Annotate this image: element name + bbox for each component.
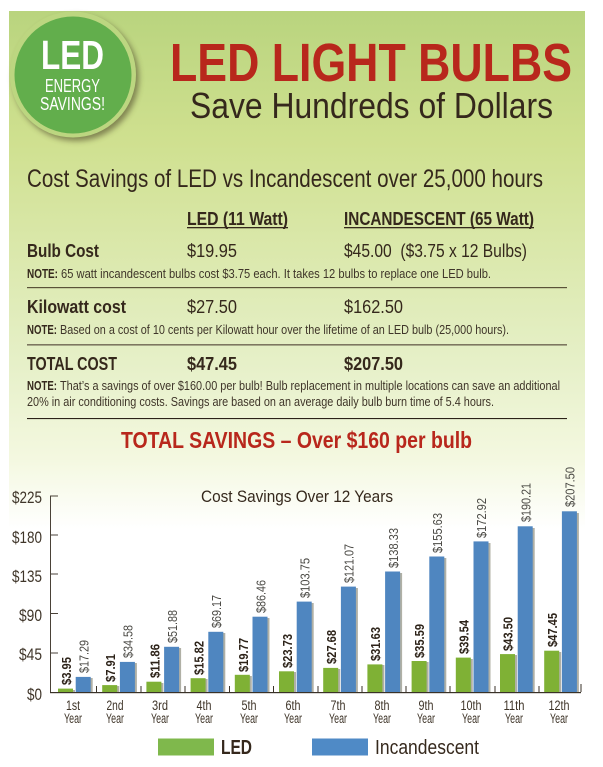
value labels: Incandescent: $86.46 — [254, 580, 268, 613]
column header: incandescent: INCANDESCENT (65 Watt) — [344, 208, 534, 229]
x axis year labels: Year — [417, 711, 435, 726]
value labels: Incandescent: $17.29 — [76, 640, 92, 673]
value labels: LED: $3.95 — [59, 657, 74, 685]
y axis — [12, 489, 58, 704]
x axis year labels: 3rd — [152, 698, 168, 713]
row: total cost: 20% in air conditioning costs. Savings are based on an average daily bulb burn time of 5.4 hours. — [27, 395, 494, 409]
bar chart: cost savings over 12 years — [12, 467, 581, 726]
legend — [158, 737, 479, 759]
x axis year labels: Year — [240, 711, 258, 726]
x axis year labels: Year — [195, 711, 213, 726]
value labels: Incandescent: $138.33 — [386, 528, 401, 568]
legend: LED: LED — [221, 737, 252, 759]
x axis year labels: Year — [151, 711, 169, 726]
y axis: $135 — [12, 568, 42, 586]
x axis year labels: 2nd — [106, 698, 124, 713]
value labels: Incandescent: $172.92 — [474, 498, 489, 538]
legend: LED — [158, 737, 252, 759]
bars: Incandescent — [76, 511, 579, 692]
value labels: LED: $27.68 — [324, 630, 339, 664]
x axis year labels: 1st — [66, 698, 80, 713]
value labels: Incandescent: $121.07 — [342, 544, 356, 583]
value labels: Incandescent: $34.58 — [120, 625, 136, 658]
row: kilowatt cost: $162.50 — [344, 296, 403, 317]
y axis: $45 — [19, 646, 42, 664]
value labels: Incandescent: $103.75 — [298, 558, 312, 598]
value labels: Incandescent: $190.21 — [518, 483, 534, 522]
x axis year labels: Year — [64, 711, 82, 726]
value labels: Incandescent: $69.17 — [209, 595, 224, 628]
row: bulb cost: $45.00 ($3.75 x 12 Bulbs) — [344, 240, 527, 261]
row: bulb cost: NOTE: — [27, 267, 58, 281]
value labels: Incandescent — [76, 467, 578, 673]
row: total cost: $47.45 — [187, 353, 237, 374]
x axis year labels: 5th — [242, 698, 256, 713]
row: total cost: NOTE: — [27, 379, 57, 393]
x axis year labels: 8th — [374, 698, 390, 713]
badge: LED energy savings — [10, 12, 139, 141]
x axis year labels: 4th — [196, 698, 212, 713]
value labels: LED: $23.73 — [280, 634, 295, 668]
x axis year labels: 9th — [418, 698, 434, 713]
y axis: $225 — [12, 489, 42, 507]
value labels: LED: $11.86 — [148, 644, 162, 678]
x axis year labels: Year — [462, 711, 480, 726]
value labels: LED — [59, 613, 560, 685]
x axis year labels: Year — [329, 711, 347, 726]
row: kilowatt cost: $27.50 — [187, 296, 237, 317]
x axis year labels: Year — [106, 711, 124, 726]
y axis: $90 — [19, 607, 42, 625]
column header: LED: LED (11 Watt) — [187, 208, 288, 229]
y axis: $180 — [12, 529, 42, 547]
value labels: LED: $47.45 — [545, 613, 560, 647]
row: kilowatt cost — [27, 296, 509, 337]
row: bulb cost: 65 watt incandescent bulbs cost $3.75 each. It takes 12 bulbs to replace one LED bulb. — [61, 267, 491, 281]
x axis year labels: Year — [550, 711, 568, 726]
x axis year labels: 12th — [548, 698, 570, 713]
row: total cost — [27, 353, 560, 409]
x axis year labels — [64, 698, 570, 726]
background panel — [9, 11, 585, 651]
y axis: $0 — [27, 686, 42, 704]
value labels: LED: $19.77 — [236, 638, 251, 672]
row: bulb cost: $19.95 — [187, 240, 237, 261]
x axis year labels: 11th — [504, 698, 524, 713]
row: kilowatt cost: Kilowatt cost — [27, 296, 126, 317]
badge: LED energy savings: SAVINGS! — [40, 94, 105, 114]
row: bulb cost — [27, 240, 527, 281]
legend: Incandescent — [312, 737, 479, 759]
x axis year labels: Year — [505, 711, 523, 726]
value labels: Incandescent: $207.50 — [562, 467, 578, 507]
value labels: Incandescent: $155.63 — [430, 513, 445, 553]
chart title: Cost Savings Over 12 Years — [201, 487, 393, 506]
x axis year labels: 6th — [286, 698, 300, 713]
total savings headline: TOTAL SAVINGS – Over $160 per bulb — [121, 427, 472, 453]
cost table — [27, 208, 567, 419]
badge: LED energy savings: ENERGY — [45, 76, 100, 96]
row: kilowatt cost: Based on a cost of 10 cents per Kilowatt hour over the lifetime of an LED bulb (25,000 hours). — [60, 323, 509, 337]
legend: Incandescent: Incandescent — [375, 737, 479, 759]
row: bulb cost: Bulb Cost — [27, 240, 99, 261]
row: total cost: TOTAL COST — [27, 353, 118, 374]
value labels: LED: $39.54 — [456, 619, 472, 654]
x axis year labels: 10th — [460, 698, 482, 713]
x axis year labels: 7th — [330, 698, 346, 713]
subtitle: Save Hundreds of Dollars — [190, 85, 553, 126]
value labels: LED: $31.63 — [368, 627, 383, 661]
badge: LED energy savings: LED — [41, 32, 104, 78]
value labels: LED: $43.50 — [500, 617, 516, 651]
bars: LED — [58, 651, 561, 692]
value labels: Incandescent: $51.88 — [165, 610, 180, 643]
x axis year labels: Year — [284, 711, 302, 726]
row: kilowatt cost: NOTE: — [27, 323, 57, 337]
x axis — [50, 684, 581, 693]
value labels: LED: $15.82 — [192, 641, 206, 675]
row: total cost: $207.50 — [344, 353, 403, 374]
value labels: LED: $7.91 — [103, 654, 118, 682]
x axis year labels: Year — [373, 711, 391, 726]
value labels: LED: $35.59 — [412, 624, 427, 658]
